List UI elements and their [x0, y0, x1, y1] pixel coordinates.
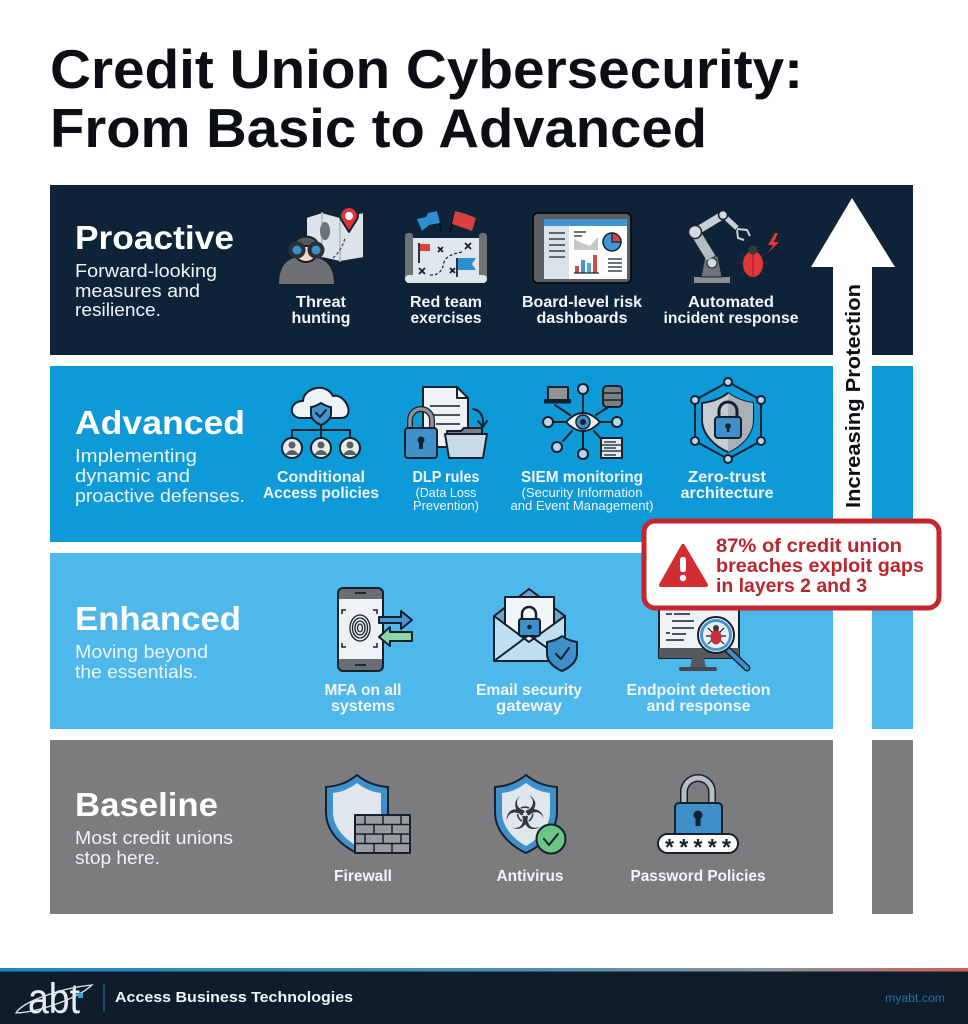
- panel: baseline: [50, 740, 913, 914]
- callout text: [716, 535, 924, 597]
- description: advanced: Implementing: [75, 446, 197, 466]
- label: email security gateway: [476, 682, 582, 715]
- callout text: 87% of credit union: [716, 535, 902, 557]
- description: proactive: resilience.: [75, 300, 161, 320]
- website: myabt.com: [885, 993, 945, 1005]
- label: dlp rules: (Data Loss: [416, 486, 476, 500]
- title: Credit Union Cybersecurity:: [50, 38, 803, 100]
- icon: password policies: *****: [665, 834, 731, 860]
- description: enhanced: the essentials.: [75, 662, 198, 682]
- callout text: breaches exploit gaps: [716, 555, 924, 577]
- icon: antivirus: ☣: [504, 786, 546, 840]
- label: endpoint detection and response: [626, 682, 770, 715]
- description: proactive: measures and: [75, 281, 200, 301]
- icon: zero-trust architecture: [691, 378, 765, 463]
- footer: [0, 968, 968, 1024]
- icon: conditional access policies: [282, 388, 360, 458]
- label: zero-trust architecture: architecture: [680, 485, 774, 502]
- panel: enhanced: [50, 553, 913, 729]
- logo: abt: abt: [28, 975, 80, 1023]
- icon: firewall: [326, 775, 410, 853]
- panel: advanced: [50, 366, 913, 542]
- heading: advanced: Advanced: [75, 404, 245, 441]
- callout: 87% statistic: [644, 521, 939, 608]
- description: proactive: Forward-looking: [75, 261, 217, 281]
- description: enhanced: Moving beyond: [75, 642, 208, 662]
- label: red team exercises: exercises: [410, 310, 482, 327]
- label: email security gateway: gateway: [496, 698, 562, 715]
- label: mfa on all systems: MFA on all: [324, 682, 402, 699]
- label: automated incident response: Automated: [688, 294, 774, 311]
- label: firewall: Firewall: [334, 868, 392, 885]
- icon: endpoint detection and response: [659, 600, 747, 671]
- label: endpoint detection and response: Endpoint detection: [626, 682, 770, 699]
- label: automated incident response: incident response: [664, 310, 799, 327]
- heading: baseline: Baseline: [75, 786, 218, 823]
- label: siem monitoring: SIEM monitoring: [521, 469, 643, 486]
- description: proactive: [75, 261, 217, 320]
- title: [50, 38, 803, 159]
- label: dlp rules: DLP rules: [412, 469, 480, 486]
- heading: enhanced: Enhanced: [75, 600, 241, 637]
- description: advanced: dynamic and: [75, 466, 190, 486]
- label: password policies: Password Policies: [630, 868, 766, 885]
- icon: red team exercises: [405, 211, 487, 283]
- label: dlp rules: Prevention): [413, 499, 479, 513]
- label: zero-trust architecture: Zero-trust: [688, 469, 766, 486]
- title: From Basic to Advanced: [50, 97, 707, 159]
- label: board-level risk dashboards: dashboards: [536, 310, 628, 327]
- description: baseline: Most credit unions: [75, 828, 233, 848]
- label: board-level risk dashboards: Board-level risk: [522, 294, 642, 311]
- label: antivirus: Antivirus: [496, 868, 564, 885]
- icon: mfa on all systems: [338, 588, 412, 671]
- label: threat hunting: [292, 294, 350, 327]
- callout text: in layers 2 and 3: [716, 575, 867, 597]
- label: threat hunting: Threat: [296, 294, 346, 311]
- label: dlp rules: [412, 469, 480, 513]
- label: mfa on all systems: systems: [331, 698, 395, 715]
- description: enhanced: [75, 642, 208, 682]
- icon: warning triangle: [661, 546, 706, 585]
- icon: dlp rules: [405, 387, 487, 458]
- label: conditional access policies: Access policies: [263, 485, 379, 502]
- label: board-level risk dashboards: [522, 294, 642, 327]
- label: conditional access policies: Conditional: [277, 469, 365, 486]
- panel: proactive: [50, 185, 913, 355]
- label: siem monitoring: and Event Management): [510, 499, 654, 513]
- description: baseline: stop here.: [75, 848, 160, 868]
- icon: board-level risk dashboard: [533, 213, 631, 283]
- icon: antivirus: [495, 775, 566, 854]
- heading: proactive: Proactive: [75, 219, 234, 256]
- label: red team exercises: Red team: [410, 294, 482, 311]
- arrow label: Increasing Protection: [842, 284, 865, 508]
- label: zero-trust architecture: [680, 469, 774, 502]
- label: endpoint detection and response: and response: [646, 698, 751, 715]
- icon: threat hunting: [278, 207, 364, 285]
- description: baseline: [75, 828, 233, 868]
- label: email security gateway: Email security: [476, 682, 582, 699]
- label: mfa on all systems: [324, 682, 402, 715]
- label: siem monitoring: [510, 469, 654, 513]
- label: red team exercises: [410, 294, 482, 327]
- icon: email security gateway: [494, 589, 577, 671]
- label: threat hunting: hunting: [292, 310, 350, 327]
- company name: Access Business Technologies: [115, 989, 353, 1006]
- icon: password policies: [658, 778, 738, 860]
- arrow: increasing protection: [811, 198, 895, 914]
- description: advanced: proactive defenses.: [75, 486, 245, 506]
- description: advanced: [75, 446, 245, 506]
- icon: siem monitoring: [543, 384, 622, 459]
- icon: automated incident response: [688, 210, 779, 283]
- label: siem monitoring: (Security Information: [522, 486, 643, 500]
- label: automated incident response: [664, 294, 799, 327]
- label: conditional access policies: [263, 469, 379, 502]
